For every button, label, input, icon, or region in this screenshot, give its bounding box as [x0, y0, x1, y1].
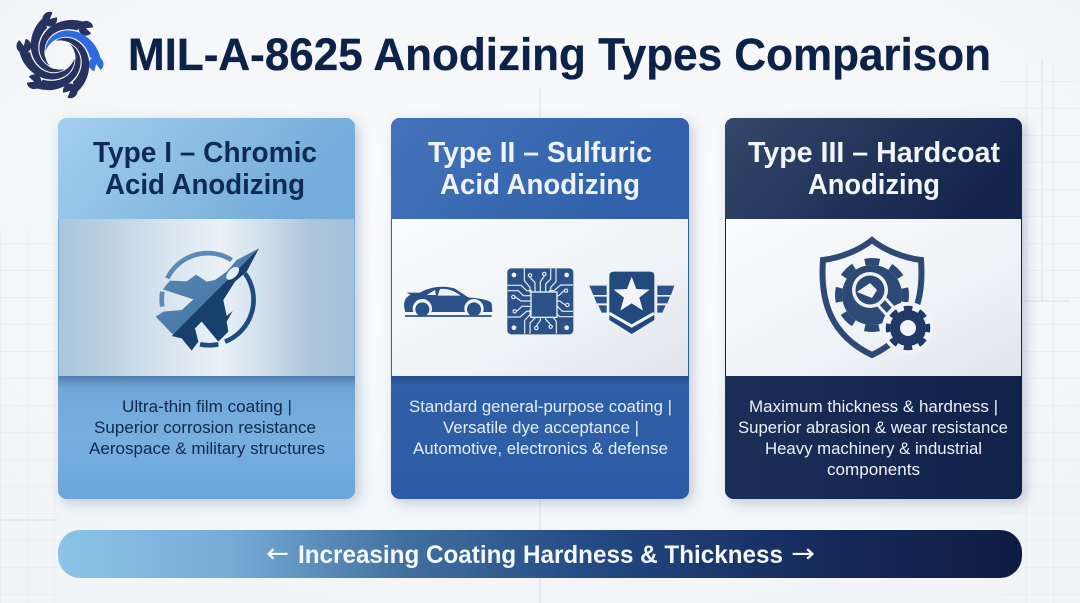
logo: swirl of wrenches [16, 5, 104, 105]
gradient arrow bar: increasing hardness and thickness [58, 530, 1022, 578]
panel: Type III hardcoat anodizing [725, 118, 1022, 499]
icon: fighter jet in ring [156, 248, 259, 351]
panel: Type II sulfuric acid anodizing [391, 118, 689, 499]
icon: circuit chip [507, 268, 573, 334]
text: Type I description: Ultra-thin film coating | [122, 398, 292, 416]
panel: Type I chromic acid anodizing [58, 118, 355, 499]
heading: Type III [748, 137, 1000, 201]
heading: Type III: Anodizing [808, 169, 940, 201]
heading: Type III: Type III – Hardcoat [748, 137, 1000, 169]
icon: military emblem [589, 272, 674, 334]
text: Type I description: Superior corrosion resistance [94, 419, 316, 437]
text: Type II description: Standard general-purpose coating | [409, 398, 672, 416]
heading: Type II: Acid Anodizing [440, 169, 640, 201]
text: Type III description: components [827, 461, 920, 479]
text: Type III description: Maximum thickness & hardness | [749, 398, 998, 416]
heading: Type I: Acid Anodizing [105, 169, 305, 201]
text: Type II description: Automotive, electronics & defense [413, 440, 668, 458]
text: Type III description [738, 398, 1008, 479]
text: Type II description [409, 398, 672, 458]
gradient arrow bar: increasing hardness and thickness: ← [266, 539, 289, 569]
text: Type III description: Superior abrasion & wear resistance [738, 419, 1008, 437]
gradient arrow bar: increasing hardness and thickness: Increasing Coating Hardness & Thickness [298, 541, 783, 569]
text: Type II description: Versatile dye acceptance | [443, 419, 639, 437]
text: Type I description [89, 398, 325, 458]
heading: Type II [428, 137, 652, 201]
icon: shield with gear and wrench [823, 240, 934, 355]
gradient arrow bar: increasing hardness and thickness: → [791, 539, 815, 569]
icon: car [404, 287, 492, 318]
text: Type I description: Aerospace & military structures [89, 440, 325, 458]
title: MIL-A-8625 Anodizing Types Comparison [128, 29, 991, 80]
heading: Type I: Type I – Chromic [93, 137, 317, 169]
heading: Type I [93, 137, 317, 201]
heading: Type II: Type II – Sulfuric [428, 137, 652, 169]
text: Type III description: Heavy machinery & industrial [765, 440, 982, 458]
